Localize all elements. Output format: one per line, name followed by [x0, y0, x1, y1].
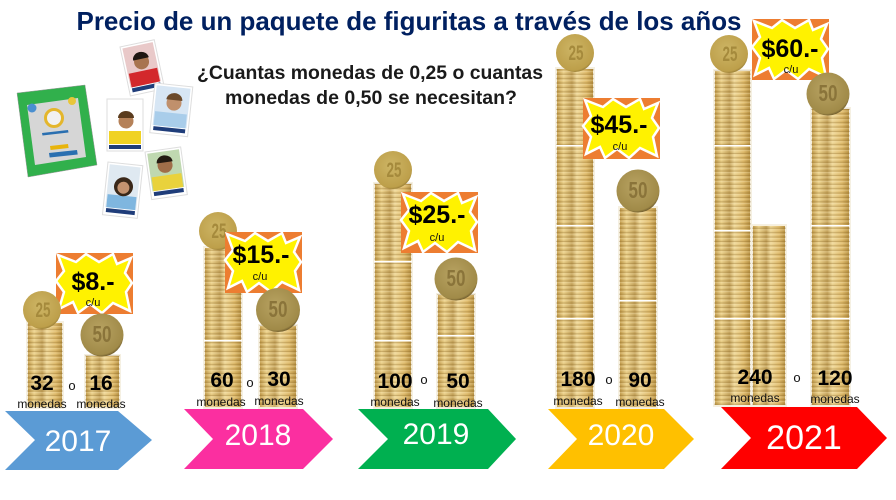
- separator o: o: [68, 378, 76, 393]
- arrow: 2017: [5, 411, 152, 470]
- sticker pack and stickers illustration: [17, 40, 193, 218]
- count: 50 monedas: [433, 370, 483, 410]
- coin stack: 16 coins of 0,50: [85, 355, 120, 408]
- coin stack: 32 coins of 0,25: [27, 322, 63, 408]
- coin: 25 centavos: 25: [212, 220, 227, 243]
- coin stack: extra 0,25 column: [752, 225, 786, 406]
- subtitle question: ¿Cuantas monedas de 0,25 o cuantas: [197, 62, 543, 84]
- title: Precio de un paquete de figuritas a través de los años: [76, 6, 742, 36]
- price burst: $8: $8.-: [71, 268, 115, 296]
- coin stack: 100 coins of 0,25: [374, 183, 412, 408]
- coin stack: 120 coins of 0,50: [811, 108, 850, 406]
- count: 32 monedas: [17, 372, 67, 411]
- count: 16 monedas: 16: [89, 372, 113, 395]
- price burst: $25: [401, 192, 478, 253]
- subtitle question: monedas de 0,50 se necesitan?: [225, 87, 517, 109]
- count: 60 monedas: [196, 369, 246, 409]
- price burst: $60: c/u: [784, 64, 798, 76]
- coin: 50 centavos: [434, 258, 478, 300]
- price burst: $25: $25.-: [409, 201, 465, 229]
- panel: 2019: [358, 151, 516, 469]
- coin: 50 centavos: 50: [446, 265, 466, 291]
- arrow: 2020: 2020: [588, 419, 654, 452]
- sticker: red player: [120, 40, 165, 96]
- count: 240 monedas: 240: [737, 366, 773, 389]
- coin: 25 centavos: 25: [36, 299, 51, 322]
- count: 180 monedas: monedas: [553, 394, 603, 408]
- panel: 2018: [184, 212, 333, 469]
- price burst: $60: [752, 19, 829, 80]
- price burst: $25: c/u: [430, 232, 444, 244]
- arrow: 2017: 2017: [45, 425, 111, 458]
- sticker: yellow player: [107, 99, 143, 151]
- arrow: 2019: [358, 409, 516, 469]
- price burst: $45: c/u: [613, 141, 627, 153]
- count: 16 monedas: [76, 372, 126, 411]
- coin: 25 centavos: 25: [568, 42, 584, 65]
- separator o: o: [246, 375, 254, 390]
- count: 180 monedas: 180: [560, 368, 596, 391]
- coin: 50 centavos: 50: [268, 296, 288, 322]
- coin: 25 centavos: [199, 212, 237, 250]
- panel: 2021: [710, 19, 887, 469]
- sticker: light blue player: [150, 83, 193, 137]
- coin: 25 centavos: 25: [722, 43, 738, 66]
- count: 30 monedas: 30: [267, 368, 291, 391]
- coin: 25 centavos: 25: [386, 159, 402, 182]
- count: 100 monedas: [370, 370, 420, 409]
- count: 90 monedas: monedas: [615, 395, 665, 409]
- coin stack: 240 coins of 0,25: [714, 70, 751, 406]
- price burst: $8: c/u: [86, 297, 100, 309]
- coin: 50 centavos: [616, 170, 660, 212]
- coin: 50 centavos: [806, 72, 850, 116]
- coin: 25 centavos: [23, 291, 61, 329]
- coin: 25 centavos: [556, 34, 594, 72]
- arrow: 2018: [184, 409, 333, 469]
- panel: 2020: [548, 34, 694, 469]
- count: 32 monedas: monedas: [17, 397, 67, 411]
- arrow: 2018: 2018: [225, 419, 291, 452]
- arrow: 2021: 2021: [766, 419, 842, 457]
- sticker: long-haired player: [102, 162, 143, 218]
- sticker: yellow-shirt player: [145, 147, 187, 200]
- coin: 25 centavos: [710, 35, 748, 73]
- count: 240 monedas: monedas: [730, 391, 780, 405]
- count: 30 monedas: [254, 368, 304, 408]
- coin stack: 50 coins of 0,50: [437, 294, 475, 408]
- price burst: $60: $60.-: [762, 35, 818, 63]
- price burst: $15: [225, 232, 302, 293]
- count: 60 monedas: 60: [210, 369, 234, 392]
- panel: 2017: [5, 253, 152, 470]
- count: 32 monedas: 32: [30, 372, 54, 395]
- count: 120 monedas: monedas: [810, 392, 860, 406]
- coin stack: 60 coins of 0,25: [204, 247, 242, 408]
- price burst: $15: c/u: [253, 271, 267, 283]
- arrow: 2021: [721, 407, 887, 469]
- count: 240 monedas: [730, 366, 780, 405]
- coin: 50 centavos: [80, 314, 124, 356]
- coin stack: 90 coins of 0,50: [619, 207, 657, 408]
- coin: 50 centavos: 50: [92, 321, 112, 347]
- price burst: $8: [56, 253, 133, 314]
- count: 16 monedas: monedas: [76, 397, 126, 411]
- coin: 50 centavos: [256, 288, 300, 332]
- coin stack: 30 coins of 0,50: [259, 325, 297, 408]
- subtitle question: [197, 62, 543, 109]
- count: 50 monedas: monedas: [433, 396, 483, 410]
- count: 100 monedas: monedas: [370, 395, 420, 409]
- count: 120 monedas: [810, 367, 860, 406]
- count: 90 monedas: 90: [628, 369, 652, 392]
- separator o: o: [793, 370, 801, 385]
- arrow: 2019: 2019: [403, 418, 469, 451]
- count: 50 monedas: 50: [446, 370, 470, 393]
- coin: 25 centavos: [374, 151, 412, 189]
- price burst: $45: $45.-: [591, 111, 647, 139]
- price burst: $15: $15.-: [233, 241, 289, 269]
- coin: 50 centavos: 50: [628, 177, 648, 203]
- count: 90 monedas: [615, 369, 665, 409]
- arrow: 2020: [548, 409, 694, 469]
- count: 30 monedas: monedas: [254, 394, 304, 408]
- count: 180 monedas: [553, 368, 603, 408]
- count: 60 monedas: monedas: [196, 395, 246, 409]
- coin stack: 180 coins of 0,25: [556, 68, 594, 408]
- price burst: $45: [583, 98, 660, 159]
- separator o: o: [605, 372, 613, 387]
- coin: 50 centavos: 50: [818, 80, 838, 106]
- separator o: o: [420, 372, 428, 387]
- count: 100 monedas: 100: [377, 370, 413, 393]
- sticker pack: [17, 85, 97, 177]
- count: 120 monedas: 120: [817, 367, 853, 390]
